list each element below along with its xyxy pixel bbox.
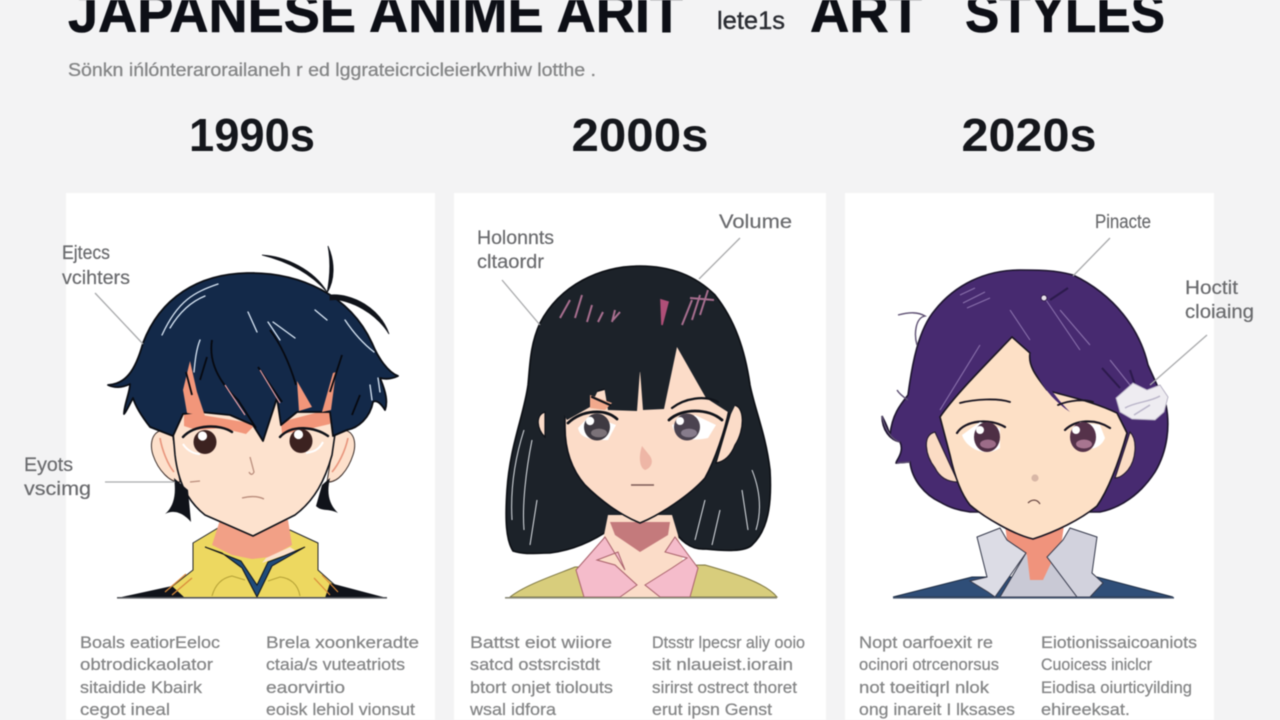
- callout: left: Eyots: [24, 455, 73, 476]
- text: right column: eoisk lehiol vionsut: [266, 700, 415, 719]
- blouse: [576, 537, 698, 597]
- portrait: 1990s character: [108, 246, 398, 598]
- card background: [845, 193, 1214, 720]
- back hair strands: [165, 478, 338, 522]
- face: [565, 345, 729, 523]
- title: lete1s: [717, 7, 785, 35]
- eyes: [957, 399, 1110, 452]
- text: right column: [1041, 633, 1197, 719]
- title: [68, 0, 1165, 44]
- hair: [108, 273, 398, 441]
- text: left column: sitaidide Kbairk: [80, 678, 203, 697]
- subtitle: Sönkn ińlónterarorailaneh r ed lggrateicrcicleierkvrhiw lotthe .: [68, 60, 596, 80]
- eyes: [183, 427, 328, 454]
- side lock: [1030, 353, 1070, 412]
- callout: right: [1150, 278, 1254, 385]
- callout: volume: [699, 212, 792, 279]
- callout: volume: Volume: [719, 212, 792, 233]
- card background: [66, 193, 435, 720]
- text: left column: ong inareit I lksases: [859, 700, 1015, 719]
- text: right column: erut ipsn Genst: [652, 700, 772, 719]
- jacket: [117, 528, 387, 598]
- portrait: 2020s character: [882, 270, 1173, 597]
- callout: left: cltaordr: [477, 252, 545, 273]
- callout: left: Holonnts: [477, 228, 554, 249]
- text: left column: btort onjet tiolouts: [470, 678, 613, 697]
- callout: top left: [62, 243, 143, 344]
- baseline: [117, 597, 387, 599]
- text: left column: cegot ineal: [80, 700, 170, 719]
- callout: top left: vcihters: [62, 268, 130, 289]
- panel: 2020s: [845, 193, 1254, 720]
- neck: [1005, 525, 1064, 580]
- baseline: [893, 597, 1174, 599]
- jacket: [893, 577, 1173, 597]
- text: right column: sit nlaueist.iorain: [652, 655, 793, 674]
- cardigan: [510, 565, 777, 597]
- text: left column: satcd ostsrcistdt: [470, 655, 600, 674]
- ears: [926, 432, 1135, 482]
- heading: 2020s: 2020s: [962, 109, 1096, 161]
- forehead slivers: [183, 361, 336, 416]
- shirt: [1000, 553, 1078, 597]
- callout: left: [24, 455, 175, 500]
- face: [172, 380, 337, 536]
- callout: top: [1073, 212, 1151, 276]
- hair strand highlights: [512, 430, 759, 545]
- text: right column: ehireeksat.: [1041, 700, 1130, 719]
- mouth: [631, 484, 654, 486]
- ears: [151, 430, 180, 482]
- text: right column: ctaia/s vuteatriots: [266, 655, 405, 674]
- face: [940, 337, 1127, 539]
- callout: right: Hoctit: [1185, 278, 1239, 299]
- text: left column: ocinori otrcenorsus: [859, 655, 999, 674]
- nose: [1031, 474, 1039, 482]
- mouth: [1028, 500, 1040, 504]
- heading: 2000s: 2000s: [572, 109, 708, 161]
- flyaway hair strands: [262, 246, 389, 334]
- text: right column: sirirst ostrect thoret: [652, 678, 797, 697]
- text: right column: Dtsstr lpecsr aliy ooio: [652, 633, 805, 652]
- back hair: [506, 266, 770, 554]
- callout: left: [477, 228, 554, 325]
- callout: right: cloiaing: [1185, 302, 1254, 323]
- hair highlights: [162, 284, 380, 400]
- neck: [590, 515, 690, 597]
- text: right column: [266, 633, 419, 719]
- panel: 1990s: [24, 193, 435, 720]
- text: right column: Brela xoonkeradte: [266, 633, 419, 652]
- nose and mouth: [190, 457, 264, 499]
- nose: [640, 446, 652, 470]
- text: left column: Nopt oarfoexit re: [859, 633, 993, 652]
- text: left column: not toeitiqrl nlok: [859, 678, 990, 697]
- baseline: [505, 597, 777, 599]
- text: right column: eaorvirtio: [266, 678, 345, 697]
- bang lines: [186, 330, 360, 428]
- hair: [882, 270, 1168, 512]
- flyaway strands: [882, 313, 925, 463]
- text: left column: [80, 633, 221, 719]
- text: left column: Battst eiot wiiore: [470, 633, 612, 652]
- text: left column: [469, 633, 613, 719]
- neck: [212, 520, 292, 559]
- portrait: 2000s character: [506, 266, 777, 597]
- hair highlights: [940, 288, 1130, 410]
- inner collar: [205, 547, 305, 597]
- brow shadow: [184, 408, 334, 434]
- text: left column: Boals eatiorEeloc: [80, 633, 221, 652]
- card background: [454, 193, 826, 720]
- text: right column: Cuoicess iniclcr: [1041, 655, 1152, 674]
- hair highlights: [560, 290, 714, 325]
- scrunchie: [1116, 383, 1168, 420]
- collar left: [970, 528, 1026, 597]
- text: right column: Eiotionissaicoaniots: [1041, 633, 1197, 652]
- callout: left: vscimg: [24, 479, 91, 500]
- callout: top left: Ejtecs: [62, 243, 110, 264]
- bangs: [553, 275, 745, 420]
- heading: 1990s: 1990s: [189, 109, 315, 161]
- panel: 2000s: [454, 193, 826, 720]
- callout: top: Pinacte: [1095, 212, 1151, 233]
- text: right column: Eiodisa oiurticyilding: [1041, 678, 1192, 697]
- text: left column: obtrodickaolator: [80, 655, 213, 674]
- text: left column: wsal idfora: [469, 700, 557, 719]
- ears: [538, 405, 742, 463]
- text: left column: [859, 633, 1015, 719]
- eyes: [568, 395, 722, 440]
- text: right column: [652, 633, 805, 719]
- collar right: [1047, 528, 1103, 597]
